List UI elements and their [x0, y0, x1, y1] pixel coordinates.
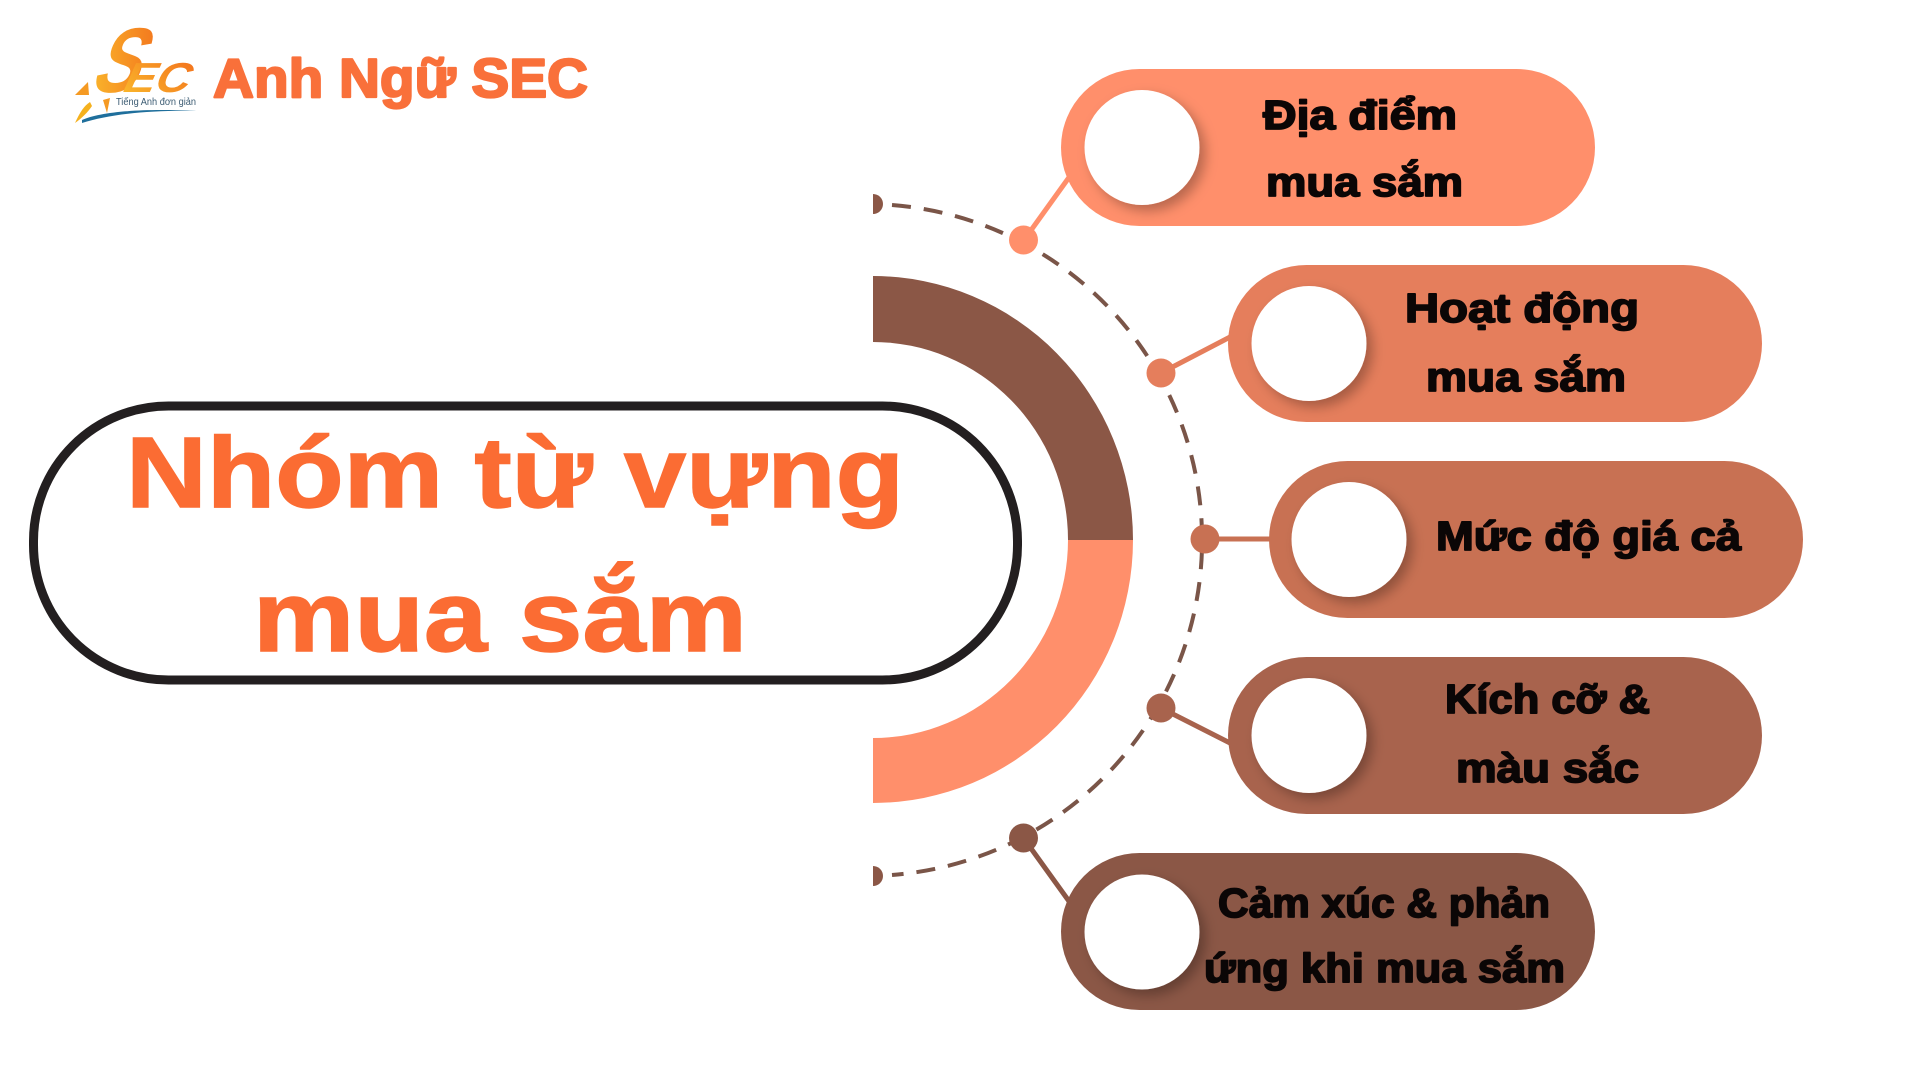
pill: [1269, 461, 1803, 618]
label line 2: màu sắc: [1456, 745, 1639, 791]
node dot: [1146, 694, 1176, 722]
connector: [1024, 176, 1070, 240]
icon: SEC rocket logo: Tiếng Anh đơn giản: [116, 96, 196, 108]
arc end cap top: [873, 194, 883, 214]
item 5: Cảm xúc & phản ứng khi mua sắm: [1009, 824, 1595, 1010]
ring: upper brown segment: [873, 276, 1133, 540]
node dot: [1009, 824, 1038, 852]
arc end cap bottom: [873, 866, 883, 886]
item 2: Hoạt động mua sắm: [1146, 265, 1762, 422]
pill: [1228, 265, 1762, 422]
label line 1: Địa điểm: [1263, 92, 1457, 138]
item 3: Mức độ giá cả: [1190, 461, 1803, 618]
brand name: Anh Ngữ SEC: [213, 47, 588, 109]
pill outline: [34, 406, 1018, 680]
label line 1: Cảm xúc & phản: [1218, 880, 1550, 926]
label line 2: mua sắm: [1266, 159, 1463, 205]
node dot: [1190, 524, 1220, 554]
label line 2: mua sắm: [1426, 354, 1626, 400]
label line 1: Kích cỡ &: [1445, 676, 1650, 722]
connector: [1161, 336, 1232, 373]
label: Mức độ giá cả: [1436, 513, 1742, 559]
connector: [1024, 838, 1071, 904]
central title pill: [34, 406, 1018, 680]
logo: Anh Ngữ SEC: [75, 10, 588, 123]
pill: [1228, 657, 1762, 814]
label line 2: ứng khi mua sắm: [1204, 945, 1565, 991]
label line 1: Hoạt động: [1405, 285, 1639, 331]
white circle: [1252, 678, 1366, 793]
icon: SEC rocket logo: S: [79, 10, 171, 112]
white circle: [1252, 286, 1366, 401]
icon: SEC rocket logo: EC: [116, 55, 203, 102]
title line 1: Nhóm từ vựng: [126, 417, 904, 529]
pill: [1061, 69, 1595, 226]
node dot: [1009, 226, 1038, 254]
title line 2: mua sắm: [253, 561, 747, 673]
item 4: Kích cỡ & màu sắc: [1146, 657, 1762, 814]
white circle: [1084, 90, 1200, 205]
dashed arc: [892, 205, 1202, 875]
connector: [1161, 708, 1232, 744]
white circle: [1292, 482, 1406, 597]
item 1: Địa điểm mua sắm: [1009, 69, 1595, 254]
connector: [1205, 536, 1275, 542]
white circle: [1084, 874, 1200, 990]
semicircle ring: [873, 276, 1133, 803]
pill: [1061, 853, 1595, 1010]
ring: lower coral segment: [873, 540, 1133, 803]
node dot: [1146, 358, 1176, 388]
